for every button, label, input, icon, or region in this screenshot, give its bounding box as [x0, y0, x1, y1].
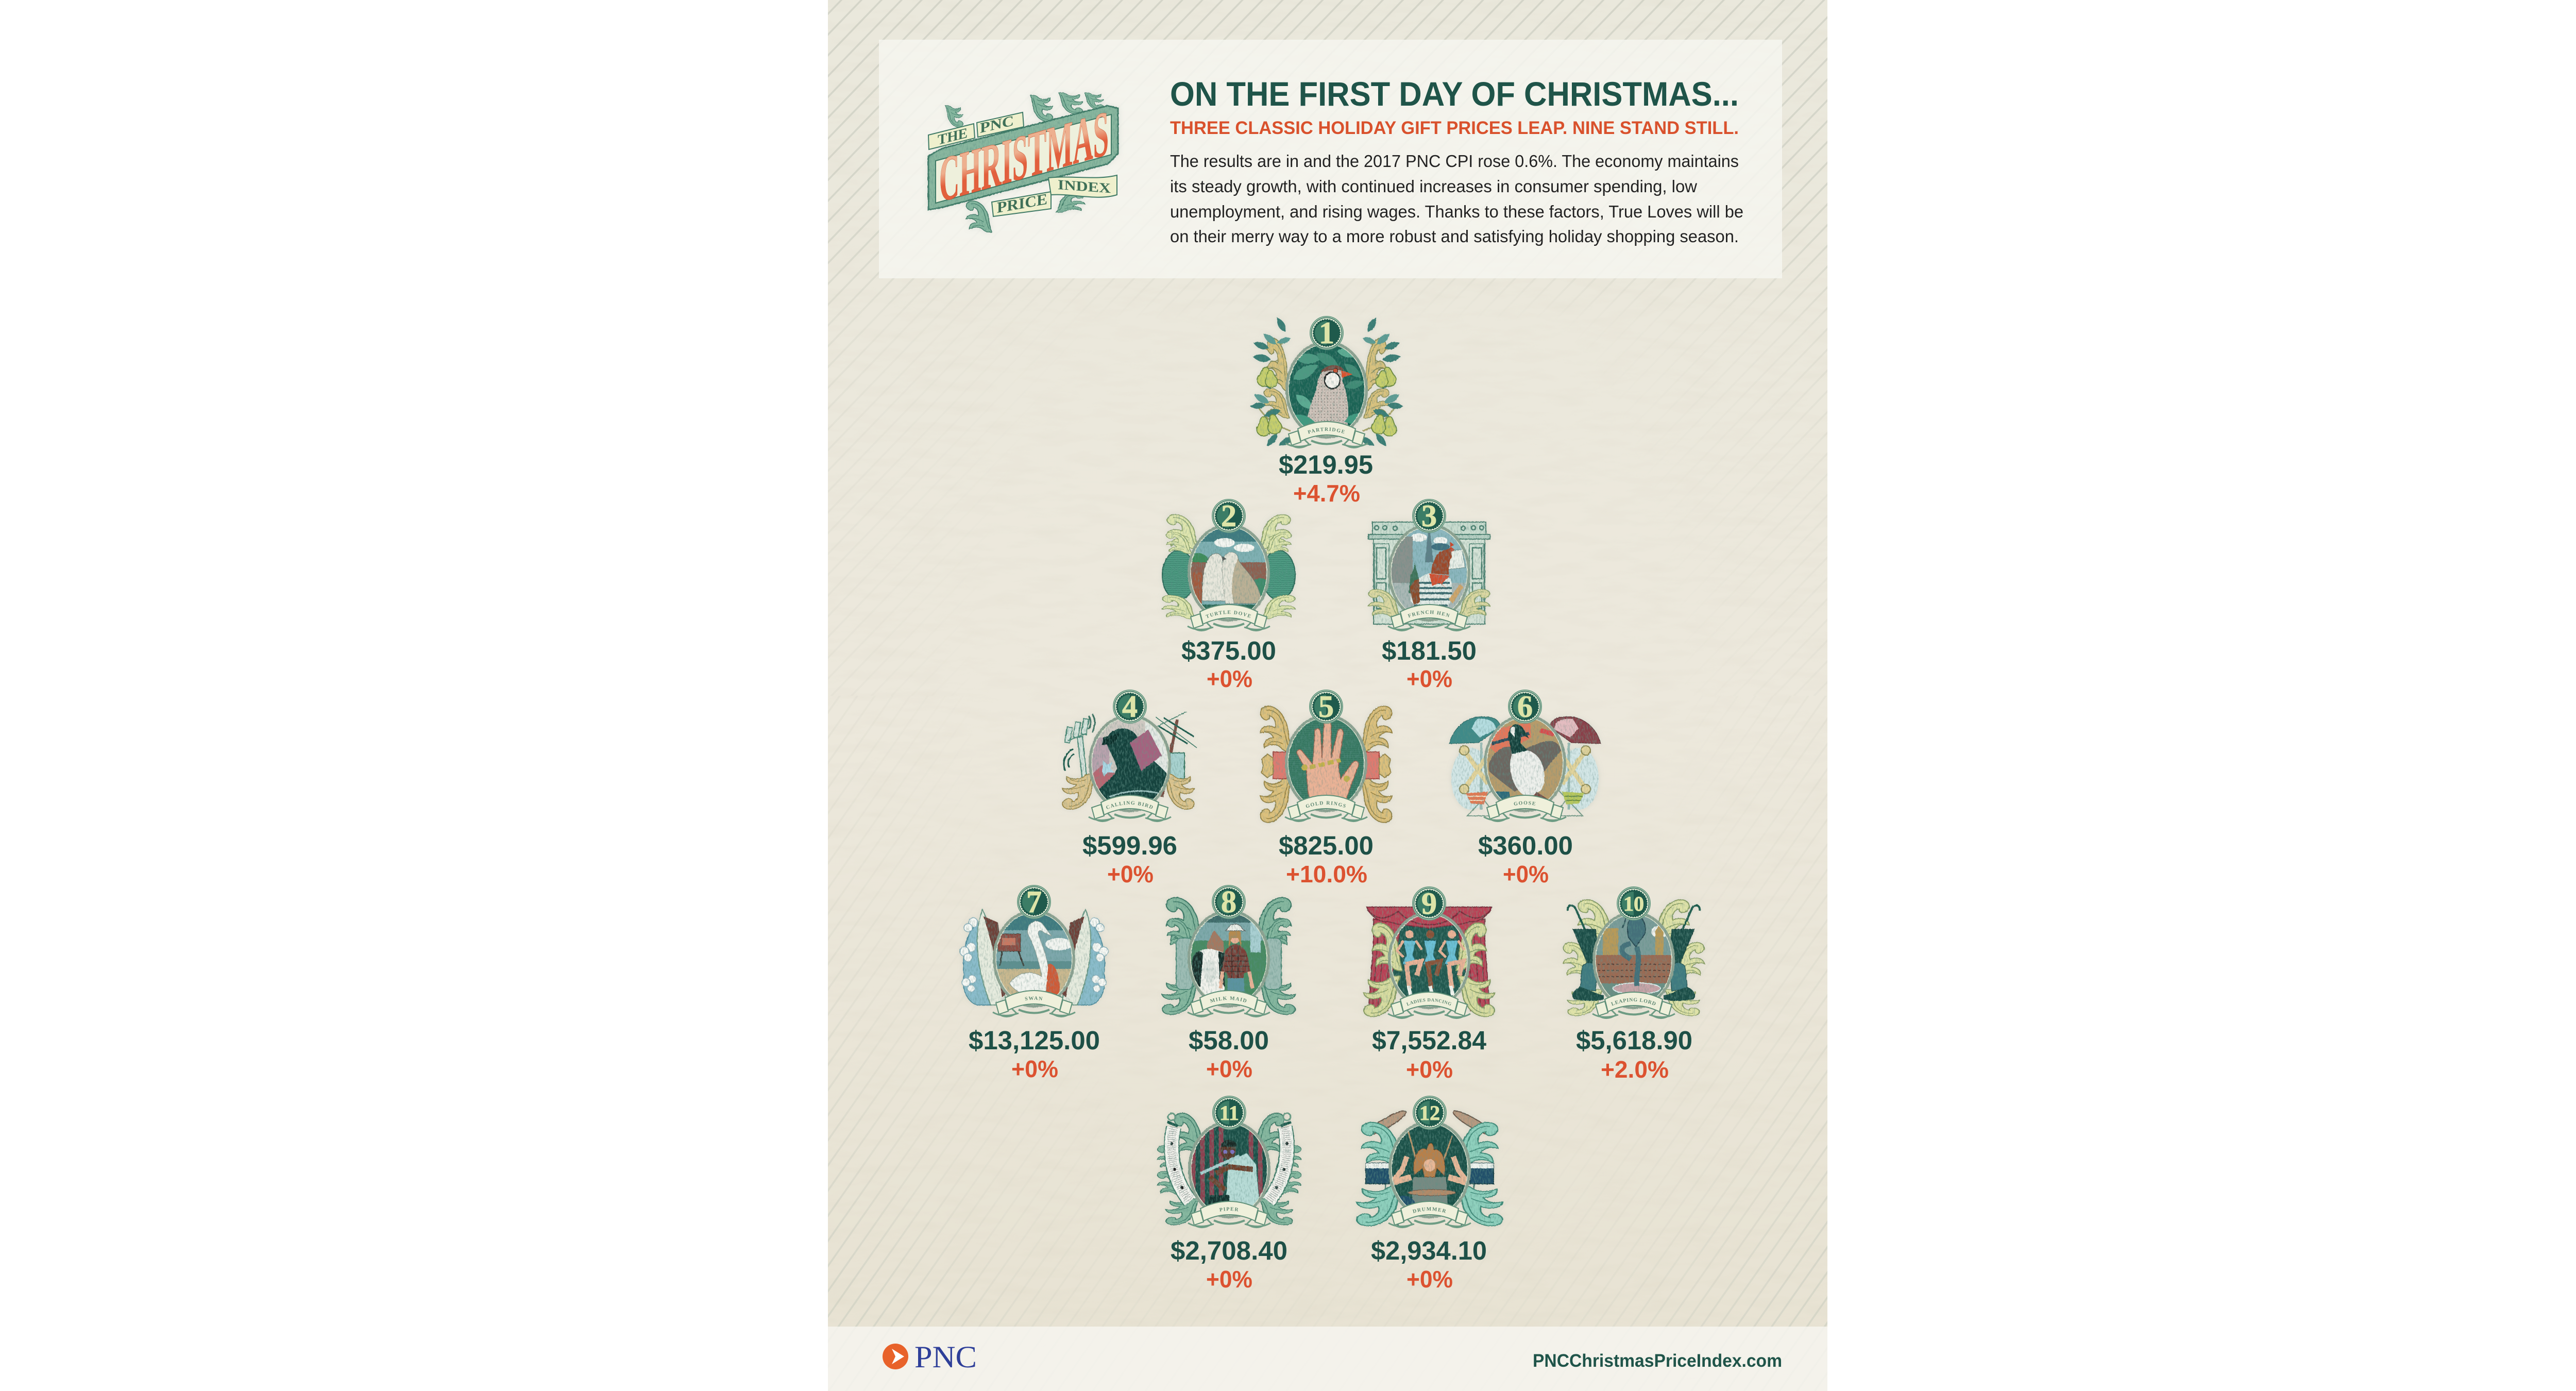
- medallion: gold rings: [1260, 690, 1392, 823]
- day 4: calling bird: [1062, 690, 1197, 887]
- medallion: piper: [1157, 1096, 1301, 1228]
- medallion: leaping lord: [1563, 887, 1704, 1018]
- day 7: swan: [960, 885, 1108, 1082]
- change: +0%: [1406, 1056, 1453, 1083]
- logo: The PNC Christmas Price Index: PNC: [980, 113, 1014, 137]
- logo: The PNC Christmas Price Index: PRICE: [997, 190, 1047, 216]
- medallion: partridge: [1250, 316, 1403, 448]
- medallion: swan: [960, 885, 1108, 1017]
- change: +0%: [1011, 1055, 1058, 1082]
- infographic page: [828, 0, 1827, 1391]
- day 11: piper: [1157, 1096, 1301, 1293]
- medallion: goose: 6: [1517, 690, 1533, 724]
- medallion: goose: [1449, 690, 1601, 822]
- logo: The PNC Christmas Price Index: INDEX: [1058, 177, 1111, 196]
- day 12: drummer: [1357, 1096, 1503, 1293]
- change: +0%: [1206, 1266, 1252, 1293]
- medallion: leaping lord: LEAPING LORD: [1611, 997, 1657, 1007]
- intro paragraph: The results are in and the 2017 PNC CPI rose 0.6%. The economy maintains: [1170, 152, 1739, 171]
- day 6: goose: [1449, 690, 1601, 887]
- title: ON THE FIRST DAY OF CHRISTMAS...: [1170, 75, 1739, 113]
- price: $2,934.10: [1371, 1236, 1487, 1265]
- change: +0%: [1406, 1266, 1453, 1293]
- day 5: gold rings: [1260, 690, 1392, 887]
- change: +0%: [1207, 665, 1252, 692]
- medallion: calling bird: CALLING BIRD: [1105, 800, 1155, 811]
- day 1: partridge: [1250, 316, 1403, 507]
- PNC logo: [883, 1340, 977, 1374]
- change: +2.0%: [1601, 1056, 1669, 1083]
- day 2: turtle dove: [1161, 499, 1296, 692]
- change: +0%: [1107, 861, 1154, 887]
- change: +0%: [1503, 861, 1549, 887]
- medallion: milk maid: MILK MAID: [1210, 996, 1248, 1004]
- medallion: turtle dove: TURTLE DOVE: [1206, 610, 1251, 618]
- icon: red umbrella: [1550, 717, 1601, 810]
- intro paragraph: [1170, 152, 1743, 246]
- change: +4.7%: [1293, 480, 1360, 507]
- medallion: french hen: [1368, 499, 1490, 631]
- day 9: ladies dancing: [1364, 886, 1495, 1083]
- logo: The PNC Christmas Price Index: THE: [938, 125, 968, 148]
- day 3: french hen: [1367, 499, 1491, 692]
- medallion: french hen: 3: [1421, 499, 1437, 533]
- price: $360.00: [1478, 831, 1573, 860]
- medallion: partridge: 1: [1319, 316, 1334, 350]
- icon: utility pole: [1145, 712, 1197, 797]
- price: $825.00: [1279, 831, 1374, 860]
- website link text: PNCChristmasPriceIndex.com: [1533, 1351, 1782, 1371]
- page background panel: [828, 0, 1827, 1391]
- medallion: calling bird: 4: [1122, 690, 1138, 724]
- dancers: [1397, 930, 1464, 995]
- price: $13,125.00: [969, 1026, 1100, 1055]
- intro paragraph: on their merry way to a more robust and satisfying holiday shopping season.: [1170, 227, 1739, 246]
- intro paragraph: unemployment, and rising wages. Thanks to these factors, True Loves will be: [1170, 202, 1743, 221]
- price: $2,708.40: [1171, 1236, 1287, 1265]
- subtitle: THREE CLASSIC HOLIDAY GIFT PRICES LEAP. NINE STAND STILL.: [1170, 118, 1739, 138]
- price: $375.00: [1181, 636, 1276, 665]
- day 8: milk maid: [1162, 885, 1295, 1082]
- medallion: gold rings: 5: [1318, 690, 1334, 724]
- header panel: [879, 40, 1782, 278]
- price: $181.50: [1382, 636, 1477, 665]
- icon: deck chairs: [1466, 792, 1584, 805]
- day 10: leaping lord: [1563, 887, 1704, 1083]
- medallion: turtle dove: [1161, 499, 1296, 632]
- intro paragraph: its steady growth, with continued increases in consumer spending, low: [1170, 177, 1697, 196]
- icon: cell tower: [1064, 714, 1095, 797]
- medallion: milk maid: [1162, 885, 1295, 1017]
- medallion: ladies dancing: 9: [1421, 886, 1437, 920]
- medallion: drummer: 12: [1419, 1101, 1440, 1125]
- change: +0%: [1406, 665, 1452, 692]
- price: $5,618.90: [1576, 1026, 1692, 1055]
- footer band: [828, 1327, 1827, 1391]
- medallion: french hen: FRENCH HEN: [1408, 610, 1450, 617]
- medallion: drummer: DRUMMER: [1412, 1206, 1447, 1215]
- change: +10.0%: [1286, 861, 1367, 887]
- PNC logo: PNC: [914, 1340, 977, 1374]
- header panel: CHRISTMAS: [939, 96, 1109, 216]
- medallion: gold rings: GOLD RINGS: [1305, 800, 1347, 810]
- medallion: swan: 7: [1026, 885, 1042, 919]
- medallion: drummer: [1357, 1096, 1503, 1228]
- medallion: leaping lord: 10: [1623, 892, 1644, 915]
- logo: The PNC Christmas Price Index: [928, 93, 1118, 232]
- medallion: partridge: PARTRIDGE: [1308, 428, 1345, 434]
- price: $7,552.84: [1372, 1026, 1487, 1055]
- medallion: piper: PIPER: [1219, 1206, 1240, 1213]
- medallion: piper: 11: [1219, 1101, 1239, 1125]
- icon: teal umbrella: [1449, 717, 1500, 810]
- medallion: goose: GOOSE: [1513, 800, 1537, 807]
- price: $599.96: [1082, 831, 1177, 860]
- medallion: ladies dancing: LADIES DANCING: [1406, 997, 1452, 1007]
- change: +0%: [1206, 1055, 1252, 1082]
- price: $58.00: [1189, 1026, 1269, 1055]
- medallion: turtle dove: 2: [1221, 499, 1236, 533]
- medallion: swan: SWAN: [1025, 996, 1043, 1002]
- medallion: milk maid: 8: [1221, 885, 1236, 919]
- medallion: ladies dancing: [1364, 886, 1495, 1018]
- medallion: calling bird: [1062, 690, 1197, 822]
- price: $219.95: [1279, 450, 1373, 479]
